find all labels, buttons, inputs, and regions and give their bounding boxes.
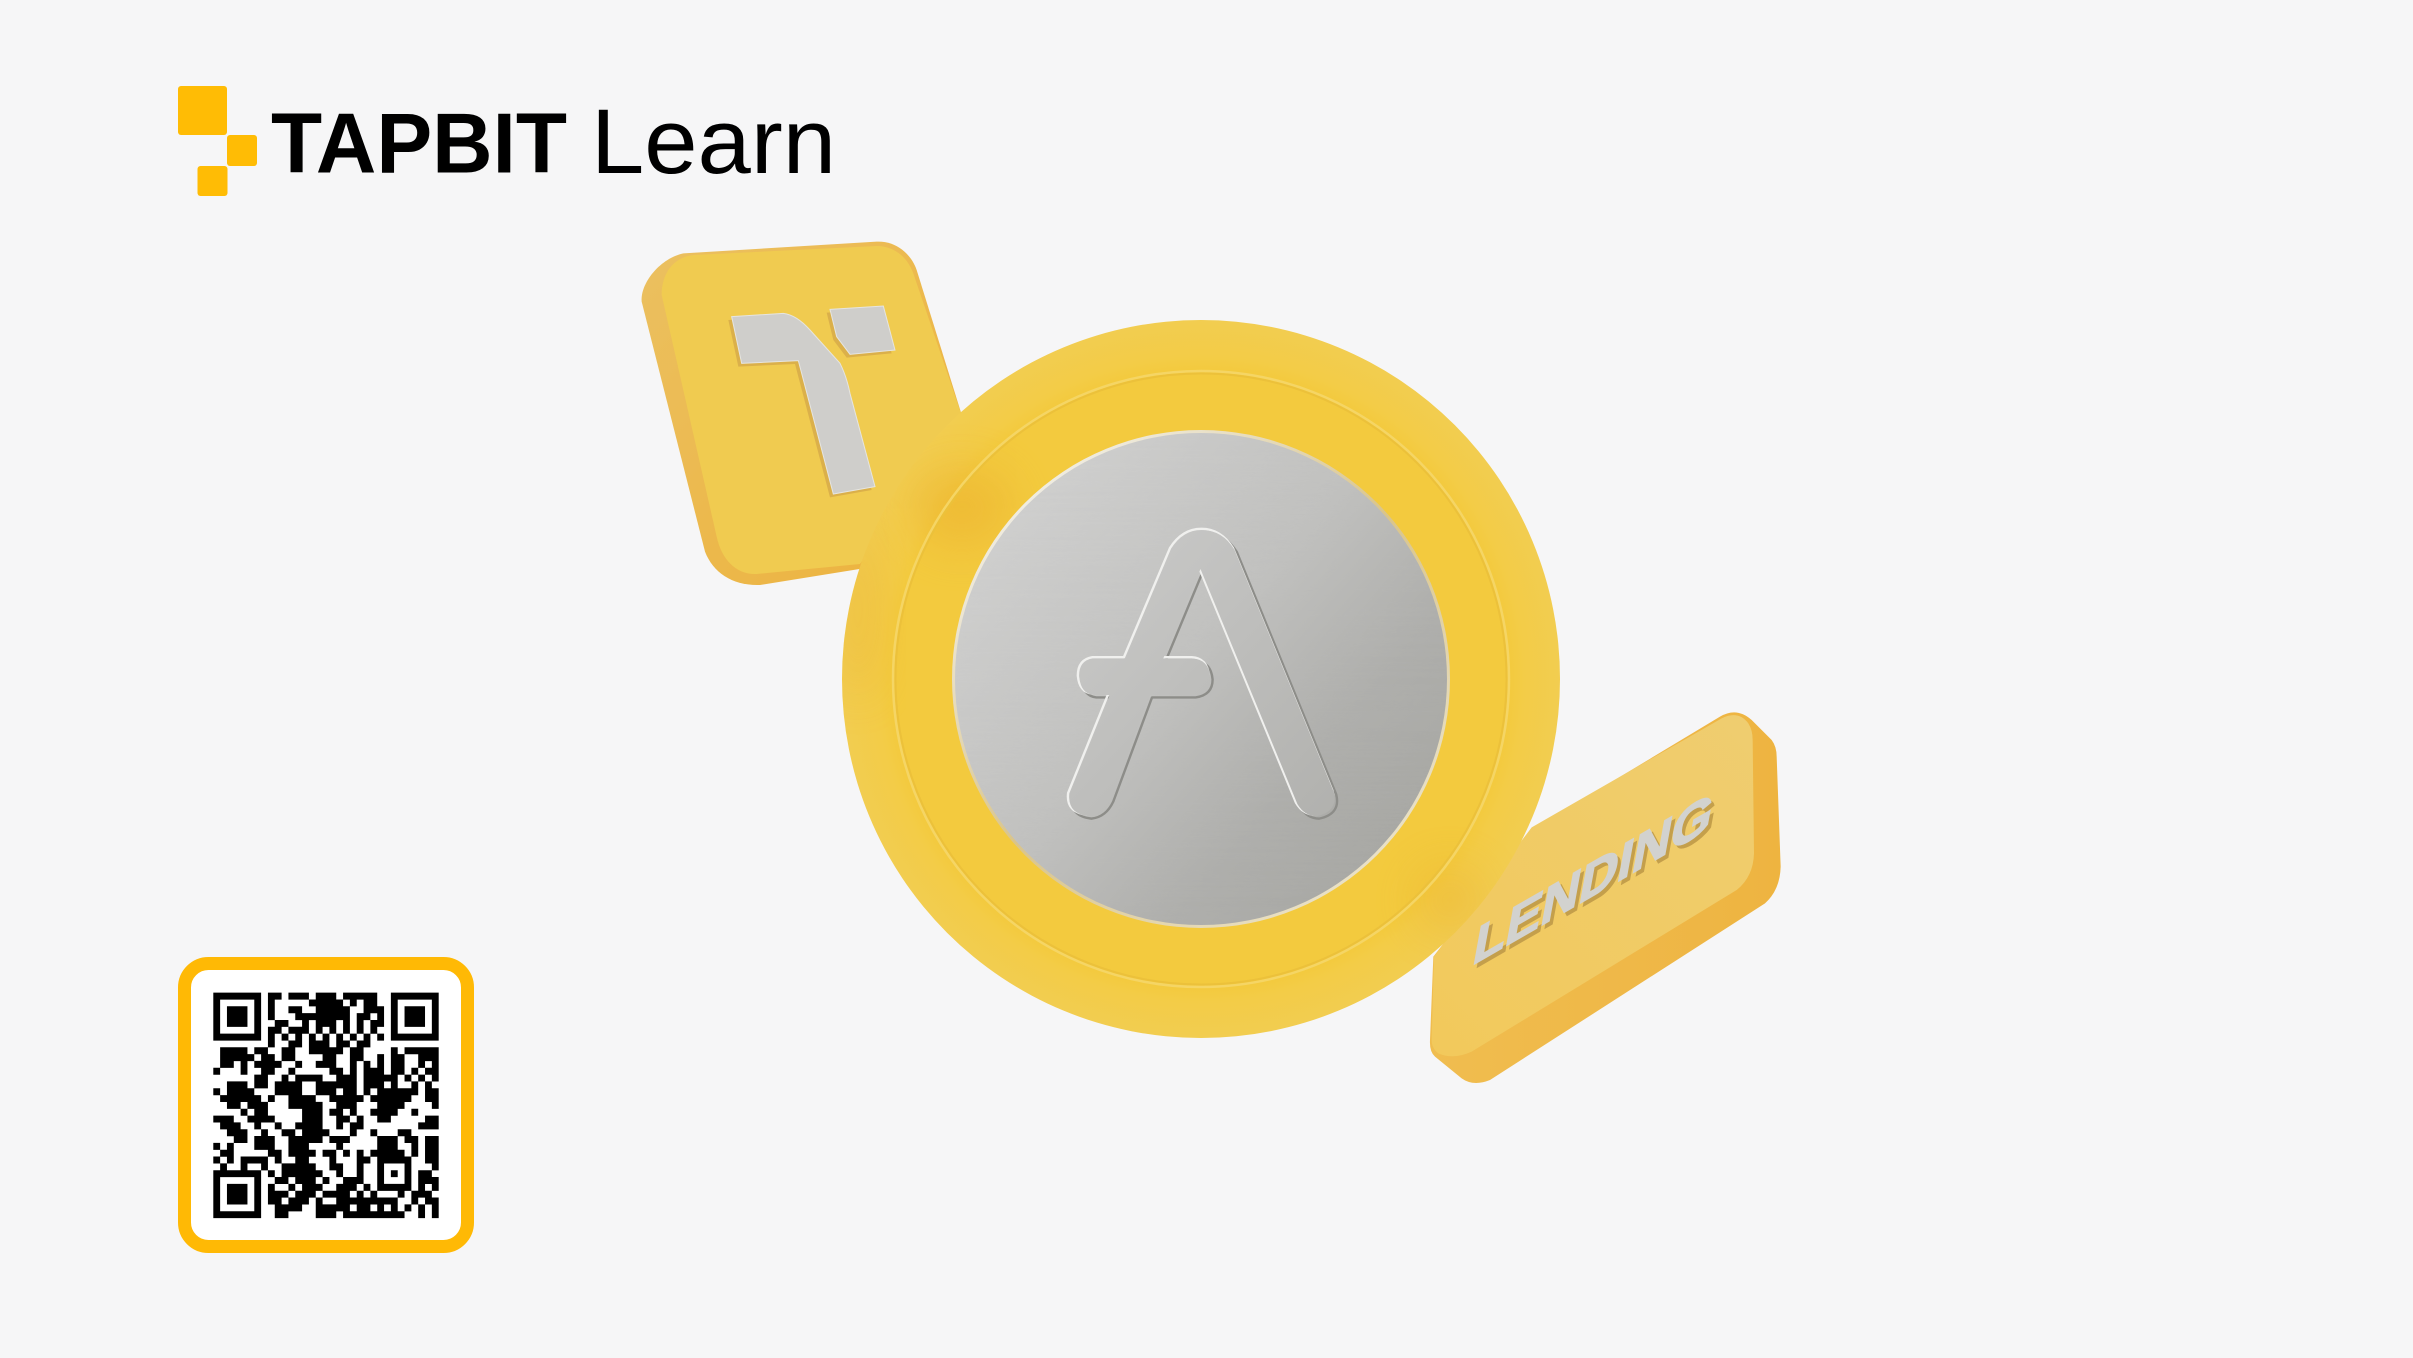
infographic canvas [178,86,1781,1253]
coin rim [842,320,1560,1038]
brand logo [178,86,836,196]
T glyph shadow [728,309,892,497]
wordmark: Learn: Learn [591,91,836,193]
silver disc [955,433,1447,925]
rim amber highlights [836,468,1484,934]
icon: stepped yellow squares [178,86,257,196]
tile face [662,246,963,574]
wordmark: TAPBIT: TAPBIT [271,96,567,192]
QR modules [213,996,439,1215]
T glyph [732,306,895,494]
tile body [1430,712,1781,1083]
embossed A mark [1068,529,1337,819]
badge: LENDING tile [1430,712,1781,1083]
coin [836,320,1560,1038]
A mark highlight edge [1068,529,1333,815]
LENDING label: LENDING [1469,780,1718,978]
rim groove [893,371,1509,987]
A mark shadow edge [1072,533,1337,819]
tile body [642,242,963,585]
QR code card [184,964,468,1246]
badge: T tile [642,242,963,585]
LENDING label shadow: LENDING [1472,783,1721,981]
tile face [1432,715,1754,1056]
silver disc edge [952,430,1450,928]
A mark face [1069,530,1335,816]
brushed metal texture [955,433,1447,925]
card frame [184,964,468,1246]
